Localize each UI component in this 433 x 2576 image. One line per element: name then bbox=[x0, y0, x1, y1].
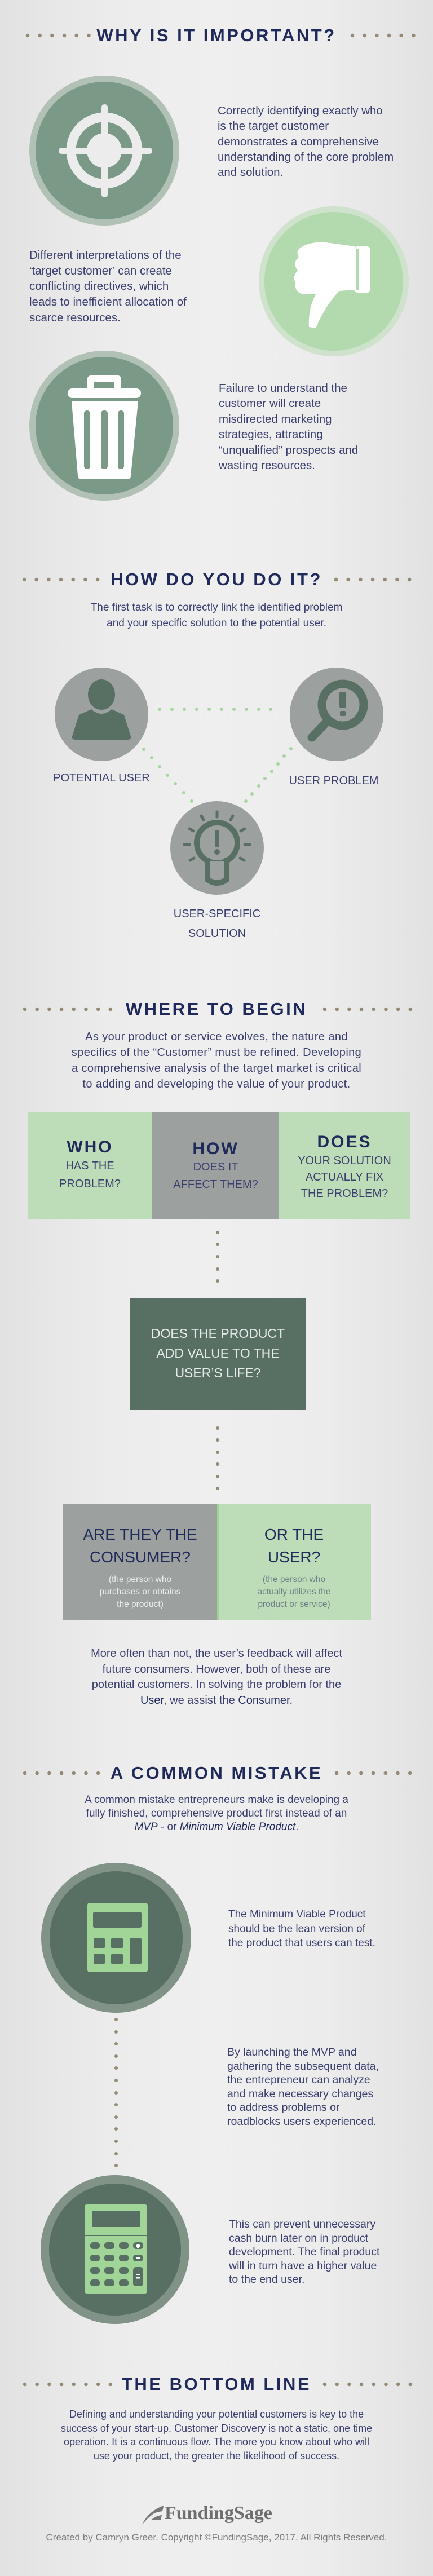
text: launching mvp: gathering the subsequent data, bbox=[227, 2060, 379, 2073]
consumer/user boxes bbox=[63, 1504, 371, 1620]
question boxes bbox=[28, 1112, 410, 1219]
text: prevent cash burn: will in turn have a higher value bbox=[229, 2260, 377, 2272]
icon: target circle bbox=[29, 76, 179, 226]
text: mvp lean: The Minimum Viable Product bbox=[228, 1908, 366, 1920]
text: different interpretations: conflicting directives, which bbox=[29, 280, 169, 293]
title: the bottom line: THE BOTTOM LINE bbox=[122, 2374, 311, 2394]
box: user: actually utilizes the bbox=[257, 1587, 331, 1597]
title: where to begin: WHERE TO BEGIN bbox=[126, 999, 307, 1019]
text: bottom line paragraph: success of your start-up. Customer Discovery is not a static, one time bbox=[61, 2422, 372, 2433]
box: who bbox=[59, 1138, 121, 1190]
text: launching mvp: the entrepreneur can analyze bbox=[227, 2074, 370, 2086]
icon: logo swoosh bbox=[142, 2506, 164, 2525]
text: failure to understand: Failure to understand the bbox=[219, 382, 347, 395]
text: failure to understand bbox=[219, 382, 358, 472]
icon: potential user bbox=[55, 668, 148, 761]
text: bottom line paragraph: operation. It is a continuous flow. The more you know about who will bbox=[64, 2436, 369, 2447]
logo: fundingsage: FundingSage bbox=[165, 2503, 272, 2524]
text: prevent cash burn: to the end user. bbox=[229, 2273, 304, 2286]
text: as your product evolves: specifics of the “Customer” must be refined. Developing bbox=[72, 1046, 361, 1059]
label: user-specific solution: USER-SPECIFIC bbox=[174, 908, 260, 920]
text: more often than not: future consumers. However, both of these are bbox=[103, 1663, 330, 1676]
text: as your product evolves: to adding and developing the value of your product. bbox=[82, 1078, 351, 1090]
box: user bbox=[257, 1526, 331, 1609]
title: how do you do it: HOW DO YOU DO IT? bbox=[111, 569, 322, 589]
title: a common mistake: A COMMON MISTAKE bbox=[111, 1763, 322, 1783]
footer: credits: Created by Camryn Greer. Copyright ©FundingSage, 2017. All Rights Reserved. bbox=[46, 2532, 387, 2543]
green dotted connectors bbox=[142, 708, 293, 803]
box: who: WHO bbox=[67, 1138, 113, 1156]
text: as your product evolves bbox=[72, 1031, 361, 1090]
box: does: THE PROBLEM? bbox=[301, 1187, 388, 1200]
text: prevent cash burn: development. The final product bbox=[229, 2246, 379, 2258]
box: how: AFFECT THEM? bbox=[173, 1178, 258, 1191]
text: bottom line paragraph: Defining and understanding your potential customers is key to the bbox=[69, 2409, 364, 2420]
text: first task bbox=[91, 602, 342, 629]
box: how bbox=[173, 1139, 258, 1191]
text: more often than not: potential customers. In solving the problem for the bbox=[92, 1678, 341, 1691]
text: correctly identifying: and solution. bbox=[218, 166, 283, 179]
text: add value: ADD VALUE TO THE bbox=[156, 1346, 280, 1360]
text: mvp lean: should be the lean version of bbox=[228, 1923, 365, 1935]
box: does: ACTUALLY FIX bbox=[306, 1171, 383, 1183]
text: prevent cash burn: This can prevent unnecessary bbox=[229, 2218, 375, 2230]
text: prevent cash burn bbox=[229, 2218, 380, 2286]
box: does bbox=[298, 1133, 391, 1200]
box: user: USER? bbox=[268, 1548, 320, 1566]
box: consumer: purchases or obtains bbox=[100, 1587, 180, 1597]
text: failure to understand: strategies, attracting bbox=[219, 428, 323, 441]
icon: calculator 2 bbox=[41, 2175, 189, 2324]
title: why is it important: WHY IS IT IMPORTANT? bbox=[96, 25, 337, 45]
box: does: DOES bbox=[317, 1133, 372, 1151]
text: failure to understand: “unqualified” prospects and bbox=[219, 444, 358, 457]
text: bottom line paragraph: use your product, the greater the likelihood of success. bbox=[94, 2450, 339, 2462]
box: who: PROBLEM? bbox=[59, 1178, 121, 1190]
text: failure to understand: customer will create bbox=[219, 397, 321, 410]
text: as your product evolves: As your product or service evolves, the nature and bbox=[85, 1031, 348, 1043]
text: correctly identifying: demonstrates a comprehensive bbox=[218, 135, 379, 148]
brown dotted connectors bbox=[114, 1231, 219, 2167]
label: potential user: POTENTIAL USER bbox=[53, 772, 150, 784]
box: does: YOUR SOLUTION bbox=[298, 1155, 391, 1167]
box: user: OR THE bbox=[264, 1526, 324, 1543]
text: more often than not: More often than not, the user’s feedback will affect bbox=[91, 1647, 342, 1660]
text: as your product evolves: a comprehensive analysis of the target market is critical bbox=[72, 1062, 361, 1075]
value box bbox=[130, 1298, 306, 1410]
text: launching mvp: roadblocks users experienced. bbox=[227, 2115, 376, 2128]
icon: user problem bbox=[290, 668, 383, 761]
box: consumer: (the person who bbox=[109, 1575, 171, 1584]
icon: trash circle bbox=[29, 351, 179, 501]
text: mvp intro: fully finished, comprehensive product first instead of an bbox=[86, 1808, 347, 1819]
text: first task: and your specific solution to the potential user. bbox=[107, 617, 326, 629]
text: launching mvp bbox=[227, 2046, 379, 2128]
box: consumer: the product) bbox=[117, 1599, 164, 1609]
text: failure to understand: wasting resources. bbox=[219, 459, 315, 472]
text: mvp lean: the product that users can test. bbox=[228, 1937, 375, 1949]
text: bottom line paragraph bbox=[61, 2409, 372, 2462]
box: consumer: ARE THEY THE bbox=[83, 1526, 197, 1543]
text: launching mvp: By launching the MVP and bbox=[227, 2046, 356, 2058]
label: user problem: USER PROBLEM bbox=[289, 775, 378, 787]
box: how: DOES IT bbox=[193, 1161, 238, 1173]
box: consumer bbox=[83, 1526, 197, 1609]
text: launching mvp: and make necessary changes bbox=[227, 2088, 373, 2100]
box: how: HOW bbox=[192, 1139, 239, 1158]
box: consumer: CONSUMER? bbox=[90, 1548, 191, 1566]
text: different interpretations bbox=[29, 249, 187, 324]
text: mvp intro bbox=[85, 1794, 348, 1833]
text: more often than not bbox=[91, 1647, 342, 1706]
box: user: product or service) bbox=[258, 1599, 330, 1609]
text: more often than not: User, we assist the Consumer. bbox=[140, 1694, 293, 1706]
text: different interpretations: Different interpretations of the bbox=[29, 249, 182, 262]
text: prevent cash burn: cash burn later on in product bbox=[229, 2232, 368, 2244]
text: different interpretations: scarce resources. bbox=[29, 311, 121, 324]
text: add value: DOES THE PRODUCT bbox=[151, 1326, 285, 1341]
box: user: (the person who bbox=[263, 1575, 325, 1584]
text: correctly identifying: understanding of the core problem bbox=[218, 151, 394, 164]
text: mvp lean bbox=[228, 1908, 375, 1949]
text: different interpretations: leads to inefficient allocation of bbox=[29, 295, 187, 308]
text: add value bbox=[151, 1326, 285, 1380]
text: correctly identifying bbox=[218, 104, 394, 179]
icon: thumbs down circle bbox=[259, 206, 409, 356]
text: add value: USER’S LIFE? bbox=[175, 1366, 261, 1380]
label: user-specific solution: SOLUTION bbox=[188, 927, 246, 940]
label: user-specific solution bbox=[174, 908, 260, 940]
text: first task: The first task is to correctly link the identified problem bbox=[91, 602, 342, 613]
icon: solution bulb bbox=[170, 801, 264, 895]
text: failure to understand: misdirected marketing bbox=[219, 413, 332, 426]
text: launching mvp: to address problems or bbox=[227, 2101, 339, 2114]
text: mvp intro: A common mistake entrepreneurs make is developing a bbox=[85, 1794, 348, 1806]
text: correctly identifying: Correctly identifying exactly who bbox=[218, 104, 383, 117]
icon: calculator 1 bbox=[41, 1863, 191, 2013]
box: who: HAS THE bbox=[65, 1160, 114, 1172]
text: mvp intro: MVP - or Minimum Viable Product. bbox=[134, 1821, 299, 1833]
text: different interpretations: ‘target customer’ can create bbox=[29, 264, 172, 277]
text: correctly identifying: is the target customer bbox=[218, 120, 329, 132]
